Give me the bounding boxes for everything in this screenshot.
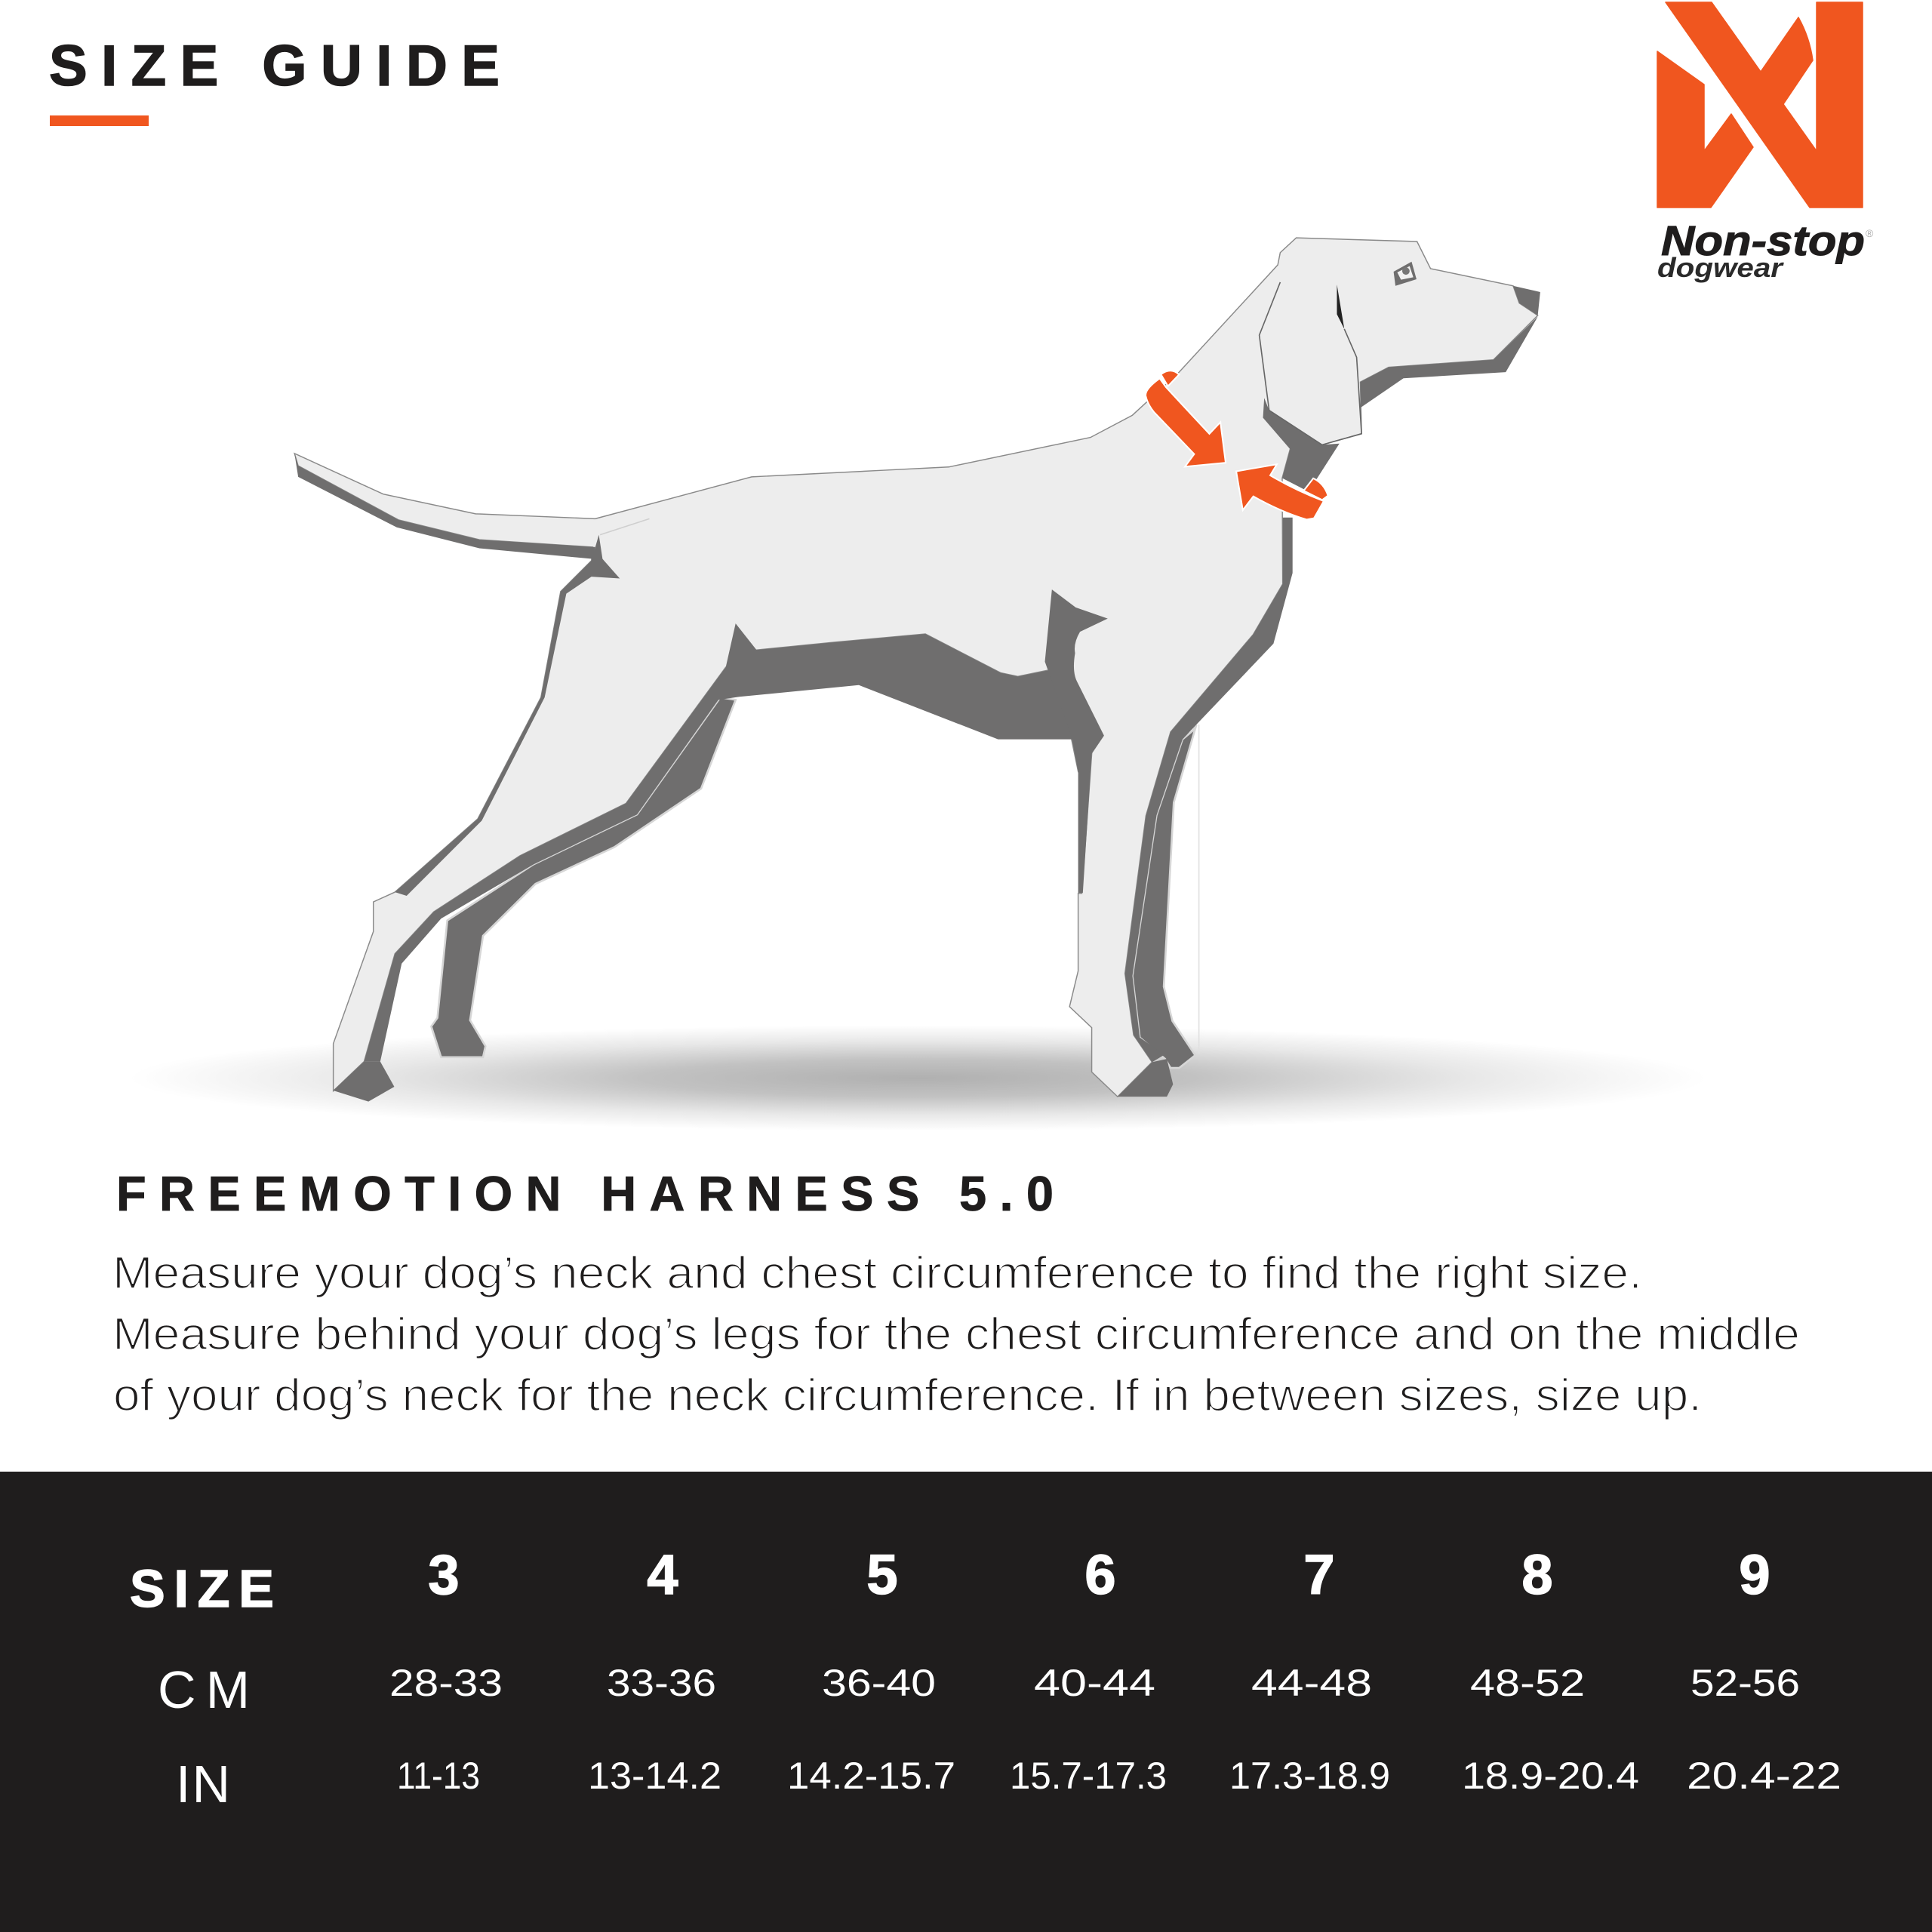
belly shadow [364,623,1075,1062]
row: centimetres: CM [158,1660,250,1719]
front paw [1118,1059,1173,1097]
row: inches: 18.9-20.4 [1462,1755,1639,1797]
illustration: dog with neck measuring arrows [129,238,1706,1131]
row: size: 4 [647,1543,678,1606]
row: inches: IN [176,1755,230,1814]
ground shadow [129,1025,1706,1131]
rump crease [600,518,649,535]
row: size: 9 [1739,1543,1770,1606]
title: size guide [49,34,500,126]
neck shadow [1263,398,1340,491]
row: size: 6 [1084,1543,1116,1606]
tail shadow [294,454,595,559]
row: size: 3 [428,1543,460,1606]
row: inches: 11-13 [397,1755,480,1797]
row: centimetres: 44-48 [1251,1662,1372,1704]
dog body [294,238,1538,1097]
row: centimetres: 33-36 [607,1662,716,1704]
chest and front leg shadow [1125,518,1293,1062]
text block: measuring instructions: Measure your dog’s neck and chest circumference to find the right size. [112,1247,1642,1298]
neck measuring arrows [1146,371,1327,518]
ear [1260,282,1361,445]
title: size guide: SIZE GUIDE [49,34,500,98]
rump shadow [395,535,620,896]
row: inches: 14.2-15.7 [787,1755,955,1797]
row: size: 5 [866,1543,898,1606]
row: centimetres: 40-44 [1034,1662,1155,1704]
back ring pieces [1162,371,1178,385]
row: size: SIZE [130,1559,274,1618]
heading: product name: FREEMOTION HARNESS 5.0 [116,1166,1054,1221]
row: inches: 15.7-17.3 [1010,1755,1167,1797]
text block: measuring instructions: of your dog’s neck for the neck circumference. If in between sizes, size up. [113,1370,1702,1420]
far leg guide line [1198,724,1200,1054]
arrow: right [1237,466,1323,518]
row: inches [176,1755,1841,1814]
row: inches: 20.4-22 [1687,1755,1841,1797]
row: size: 8 [1521,1543,1553,1606]
logo wordmark [1657,217,1874,283]
row: centimetres: 36-40 [822,1662,936,1704]
row: centimetres [158,1660,1800,1719]
body shadows [294,262,1540,1102]
elbow shadow [1045,589,1108,893]
logo wordmark: Non-stop [1661,217,1865,264]
logo wordmark: dogwear [1657,252,1784,283]
row: inches: 17.3-18.9 [1229,1755,1390,1797]
jaw shadow [1361,317,1538,408]
row: centimetres: 48-52 [1470,1662,1585,1704]
panel: size table [0,1472,1932,1932]
far front leg [1132,724,1196,1068]
hind paw [334,1062,394,1102]
logo: Non-stop dogwear [1657,2,1874,283]
logo mark [1657,2,1863,208]
ear fold [1337,285,1344,329]
row: size [130,1543,1770,1618]
row: centimetres: 28-33 [389,1662,503,1704]
text block: measuring instructions [112,1247,1800,1420]
text block: measuring instructions: Measure behind your dog’s legs for the chest circumference and on the middle [112,1309,1800,1359]
row: centimetres: 52-56 [1690,1662,1800,1704]
far hind leg [431,697,736,1057]
eye [1394,262,1417,286]
arrow: left [1146,380,1225,466]
nose [1513,286,1540,315]
row: inches: 13-14.2 [588,1755,721,1797]
logo wordmark: ® [1866,227,1874,239]
row: size: 7 [1303,1543,1335,1606]
